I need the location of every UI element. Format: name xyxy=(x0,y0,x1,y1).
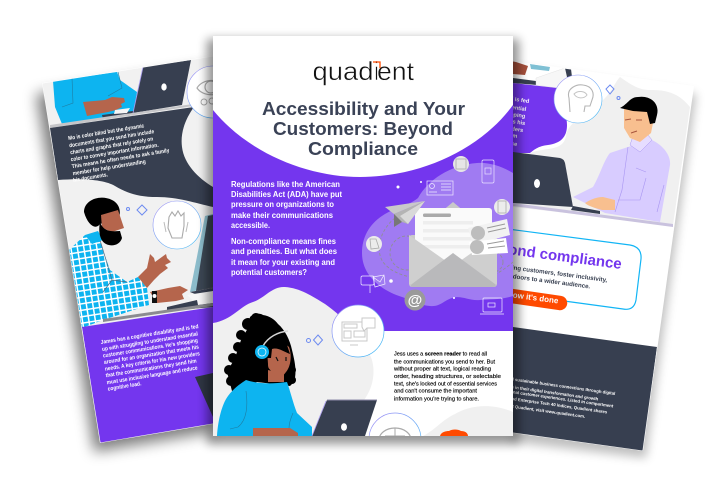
icon: document badge right xyxy=(494,199,510,215)
text: intro paragraph: and penalties. But what does xyxy=(231,247,338,256)
person: man in lavender shirt xyxy=(573,97,670,222)
icon: mailbox xyxy=(361,275,385,293)
laptop xyxy=(312,400,377,436)
laptop corner xyxy=(195,373,213,417)
text: James description: cognitive load. xyxy=(107,381,142,393)
text: Jess description: information you're trying to share. xyxy=(394,396,479,402)
text: footer about: sses in their digital transformation and growth xyxy=(504,383,599,402)
text: purple band: essential xyxy=(502,104,527,113)
logo: quad xyxy=(312,56,374,86)
text: purple band: meets his xyxy=(499,117,526,127)
purple background xyxy=(213,105,513,331)
text: James description: customer communications. He's shopping xyxy=(103,338,199,359)
text: intro paragraph: potential customers? xyxy=(231,268,307,277)
button: See how it's done xyxy=(491,288,559,306)
icon: letter card xyxy=(427,181,453,195)
text: James description: James has a cognitive disability and is fed xyxy=(100,324,200,346)
top desk remnants xyxy=(513,61,572,88)
left page sheet xyxy=(42,56,213,443)
envelope xyxy=(409,202,497,287)
text: intro paragraph: Regulations like the American xyxy=(231,180,340,189)
text: beyond compliance body: and open doors to a wider audience. xyxy=(483,270,591,291)
person: James xyxy=(69,198,188,328)
title: Accessibility and Your xyxy=(262,98,465,119)
text: footer about: and sustainable business connections through digital xyxy=(506,376,616,396)
text: beyond compliance body xyxy=(513,265,607,288)
text: Jess description xyxy=(393,352,501,402)
center page shadow xyxy=(207,39,519,444)
text: Jess description: Jess uses a screen reader to read all xyxy=(394,352,487,358)
text: James description: up with struggling to understand essential xyxy=(102,331,199,353)
text: intro paragraph: Disabilities Act (ADA) have put xyxy=(231,190,342,199)
text: Jess description: and can't consume the important xyxy=(394,388,477,394)
text: footer about: out Quadient, visit www.quadient.com. xyxy=(507,403,586,419)
panel: James purple band xyxy=(82,307,213,443)
profile cards xyxy=(468,219,510,255)
text: James description xyxy=(100,324,200,393)
illustration: envelope scene xyxy=(361,156,513,314)
text: Jess description: order, heading structures, or selectable xyxy=(394,374,501,380)
logo: ent xyxy=(377,56,415,86)
text: footer about: and Enterprise Tech 40 indices, Quadient shares xyxy=(509,396,608,415)
text: purple band: him xyxy=(507,133,518,140)
text: footer about: ptional customer experiences. Listed in compartment xyxy=(505,388,614,409)
text: James description: needs. A key criteria for his new providers xyxy=(105,351,200,373)
text: James description: must use inclusive language and reduce xyxy=(106,365,198,386)
text: Mo description: Mo is color blind but the dynamic xyxy=(68,123,145,142)
icon: sparkle xyxy=(606,85,620,100)
center page sheet xyxy=(213,36,513,436)
panel: purple band xyxy=(513,83,567,153)
icon: phone xyxy=(482,160,494,183)
text: Mo description: color to convey important information. xyxy=(70,143,159,163)
text: intro paragraph: accessible. xyxy=(231,221,270,230)
panel: center page xyxy=(207,36,519,465)
text: Mo description: member for help understanding xyxy=(72,159,147,177)
keyboard xyxy=(167,300,213,311)
panel: Mo dark band xyxy=(50,107,213,207)
title: Compliance xyxy=(308,138,418,159)
text: Jess description: the communications you send to her. But xyxy=(394,360,495,366)
text: Jess description: without proper alt text, logical reading xyxy=(393,366,491,372)
title xyxy=(262,98,465,159)
text: Mo description: documents that you send him include xyxy=(69,129,155,149)
logo xyxy=(312,56,415,86)
text: Mo description: his documents. xyxy=(73,172,109,184)
text: intro paragraph: Non-compliance means fines xyxy=(231,237,337,246)
page tint xyxy=(40,50,215,330)
left page shadow xyxy=(36,66,213,452)
panel: beyond compliance call to action xyxy=(513,229,642,310)
panel: dark footer xyxy=(504,327,657,451)
text: beyond compliance body: Retain existing customers, foster inclusivity, xyxy=(477,260,608,284)
dashed paths xyxy=(379,218,513,279)
title: Customers: Beyond xyxy=(273,118,453,139)
light purple blob xyxy=(362,163,513,306)
gray blob lower left xyxy=(213,287,374,436)
text: purple band xyxy=(513,96,530,146)
icon: laptop xyxy=(480,298,504,314)
text: Jess description: text, she's locked out of essential services xyxy=(394,382,497,388)
person: Jess xyxy=(217,313,312,436)
monitor xyxy=(190,214,213,294)
icon: hand circle xyxy=(153,201,201,249)
desk line xyxy=(513,203,673,227)
icon: at sign: @ xyxy=(408,292,422,309)
panel: right page xyxy=(510,62,700,462)
icon: document badge top xyxy=(453,156,469,172)
gray blob bottom right xyxy=(423,406,513,436)
paper plane xyxy=(385,201,425,227)
text: Mo description: charts and graphs that rely solely on xyxy=(70,136,154,156)
white lower area xyxy=(384,331,513,436)
desk line xyxy=(50,104,193,128)
right page sheet xyxy=(513,61,694,451)
icon: at sign xyxy=(404,290,426,310)
text: purple band: and is fed xyxy=(503,95,530,105)
text: James description: around for an organization that meets his xyxy=(104,345,199,366)
logo: i xyxy=(374,56,378,86)
text: James description: that the communications they send him xyxy=(105,358,197,379)
text: Mo description xyxy=(68,123,171,184)
icon: globe eye circle xyxy=(369,413,421,465)
icon: brain circle xyxy=(554,75,602,123)
text: intro paragraph: it mean for your existing and xyxy=(231,258,335,267)
orange blob xyxy=(440,430,468,436)
icon: eye circle xyxy=(186,66,213,118)
text: intro paragraph: make their communications xyxy=(231,211,334,220)
icon: screen reader circle xyxy=(332,305,384,357)
icon: sparkle xyxy=(126,205,147,215)
text: beyond compliance heading: Beyond compliance xyxy=(480,238,623,273)
icon: sparkle xyxy=(306,335,322,345)
text: purple band: shopping xyxy=(500,111,526,120)
panel: left page xyxy=(36,50,239,452)
text: intro paragraph: pressure on organizations to xyxy=(231,200,334,209)
gray blob xyxy=(513,77,690,225)
person: Mo xyxy=(53,72,137,124)
text: purple band: providers xyxy=(497,124,524,134)
small dots xyxy=(389,181,455,299)
text: purple band: reduce xyxy=(499,139,518,148)
icon: document badge left xyxy=(366,236,382,252)
text: footer about xyxy=(513,378,616,418)
text: Mo description: This means he often needs to ask a family xyxy=(71,148,171,170)
text: intro paragraph xyxy=(231,180,342,277)
right page shadow xyxy=(513,68,696,458)
laptop xyxy=(133,60,191,113)
laptop xyxy=(513,152,600,214)
